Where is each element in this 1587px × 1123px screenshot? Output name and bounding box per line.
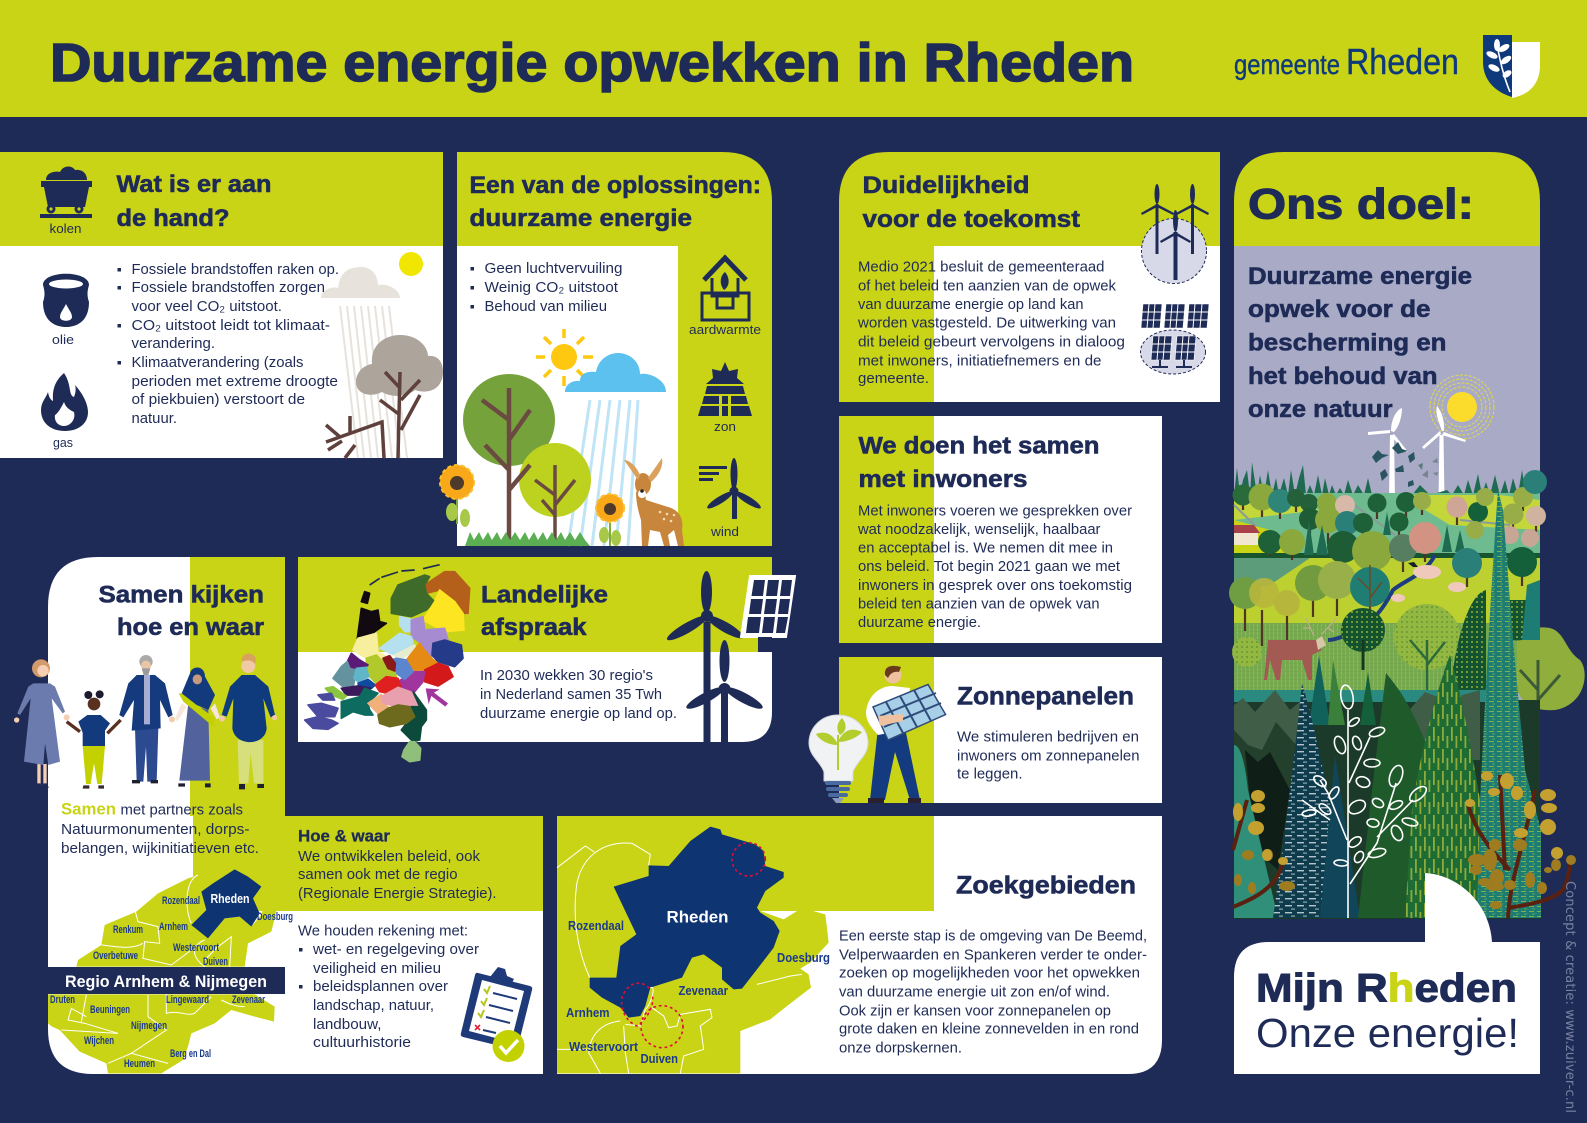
text: hoe en waar: beleidsplannen over	[313, 978, 448, 995]
map: Rheden search areas	[557, 816, 829, 1073]
text: hoe en waar: cultuurhistorie	[313, 1034, 411, 1051]
right crown tree	[1517, 627, 1585, 710]
body text	[857, 258, 1125, 387]
body text: We stimuleren bedrijven en	[957, 728, 1139, 746]
heading	[858, 432, 1100, 493]
icon: solar with sun	[698, 362, 752, 416]
map labels: Zevenaar	[678, 983, 728, 998]
heading: We doen het samen	[858, 432, 1100, 460]
bullet list: voor veel CO₂ uitstoot.	[132, 298, 282, 315]
body text: grote daken en kleine zonnevelden in en rond	[839, 1020, 1139, 1038]
label: aardwarmte: aardwarmte	[689, 322, 761, 337]
region labels: Arnhem	[159, 921, 188, 933]
label: zon: zon	[714, 419, 736, 434]
illustration: healthy nature	[440, 329, 684, 546]
body text	[957, 728, 1140, 782]
illustration: group of people holding hands	[14, 654, 277, 789]
bullet list: Weinig CO₂ uitstoot	[484, 279, 619, 296]
body text: Medio 2021 besluit de gemeenteraad	[858, 258, 1104, 276]
body text: duurzame energie op land op.	[480, 705, 677, 722]
panel: zonnepanelen	[809, 657, 1162, 803]
region labels: Wijchen	[84, 1035, 114, 1047]
heading: Wat is er aan	[116, 171, 272, 198]
arrow: pointing to Rheden region	[426, 688, 448, 707]
sheep	[1391, 562, 1466, 602]
heading: met inwoners	[858, 466, 1028, 493]
person: older man	[119, 655, 175, 783]
icon: wind turbine	[699, 458, 763, 519]
stream	[1328, 555, 1435, 640]
person: man in blue sweater	[219, 654, 277, 789]
text: hoe en waar: veiligheid en milieu	[313, 960, 441, 977]
body text: In 2030 wekken 30 regio's	[480, 667, 653, 684]
heading: Samen kijken	[98, 582, 264, 608]
heading: Duidelijkheid	[862, 172, 1030, 199]
body text: dit beleid gebeurt vervolgens in dialoog	[858, 334, 1125, 350]
text: hoe en waar: wet- en regelgeving over	[312, 941, 479, 958]
icon: solar panel	[741, 576, 795, 652]
body text	[839, 928, 1147, 1056]
dotted crowns	[1394, 604, 1460, 670]
wind turbines	[1368, 406, 1466, 501]
navy cone	[1273, 684, 1352, 918]
birds	[1372, 442, 1438, 487]
callout: mijn rheden onze energie: Onze energie!	[1256, 1010, 1519, 1056]
heading	[470, 172, 761, 232]
panel: een van de oplossingen	[440, 152, 772, 546]
text: hoe en waar: (Regionale Energie Strategie).	[298, 885, 496, 902]
region labels: Druten	[50, 994, 75, 1006]
label: wind: wind	[710, 524, 739, 539]
panel: zoekgebieden	[557, 816, 1162, 1074]
bullet list: natuur.	[132, 410, 177, 427]
heading	[481, 582, 608, 641]
body text: te leggen.	[957, 766, 1022, 782]
panel: wat is er aan de hand	[0, 152, 443, 458]
logo: gemeente Rheden: Rheden	[1346, 41, 1459, 82]
region labels: Lingewaard	[166, 994, 209, 1006]
text: samen met partners: Natuurmonumenten, dorps-	[61, 821, 249, 838]
body text: met inwoners, initiatiefnemers en de	[858, 352, 1102, 370]
panel: samen kijken hoe en waar / hoe en waar	[14, 557, 543, 1074]
heading: afspraak	[481, 614, 587, 641]
heading: voor de toekomst	[862, 206, 1080, 233]
striped cone	[1405, 655, 1490, 918]
treeline	[1234, 462, 1540, 495]
icon: gas flame	[41, 373, 88, 431]
body text: duurzame energie.	[858, 614, 981, 631]
body text: wat noodzakelijk, wenselijk, haalbaar	[857, 521, 1100, 538]
region title bar: Regio Arnhem & Nijmegen	[65, 972, 267, 991]
bullet list: perioden met extreme droogte	[132, 373, 338, 390]
body text: Met inwoners voeren we gesprekken over	[858, 502, 1132, 520]
bullet list: verandering.	[132, 335, 215, 352]
grey mountain right	[1405, 690, 1480, 760]
statement: bescherming en	[1248, 330, 1446, 356]
meadow back	[1234, 493, 1540, 555]
heading: de hand?	[116, 205, 230, 232]
conifers mid	[1309, 656, 1330, 725]
bullet list: Fossiele brandstoffen zorgen	[132, 279, 325, 296]
statement: opwek voor de	[1248, 296, 1430, 323]
text: samen met partners: belangen, wijkinitiatieven etc.	[61, 840, 259, 857]
bullet list: CO₂ uitstoot leidt tot klimaat-	[132, 317, 330, 334]
text: samen met partners	[61, 800, 259, 857]
heading: Zoekgebieden	[956, 872, 1136, 900]
region labels: Renkum	[113, 924, 143, 936]
header band	[0, 0, 1587, 117]
text: hoe en waar: samen ook met de regio	[298, 866, 458, 883]
logo: gemeente Rheden	[1234, 35, 1540, 98]
callout: mijn rheden onze energie	[1234, 873, 1540, 1074]
label: kolen: kolen	[50, 221, 82, 236]
text: hoe en waar: Hoe & waar	[298, 826, 390, 846]
bullet list: Behoud van milieu	[484, 298, 607, 315]
panel: duidelijkheid voor de toekomst	[839, 152, 1220, 402]
small trees	[1229, 470, 1547, 667]
icon: sunflower left	[440, 465, 474, 527]
body text: van duurzame energie uit zon en/of wind.	[839, 984, 1110, 1000]
map: 30 regions of the Netherlands	[305, 565, 470, 762]
heading	[862, 172, 1080, 233]
icon: clipboard with check	[461, 967, 532, 1062]
title: Duurzame energie opwekken in Rheden	[50, 33, 1134, 93]
body text: ons beleid. Tot begin 2021 gaan we met	[858, 558, 1121, 575]
region labels: Zevenaar	[232, 994, 265, 1006]
body text: en acceptabel is. We nemen dit mee in	[858, 540, 1113, 556]
region title bar	[48, 967, 285, 994]
heading: duurzame energie	[470, 205, 692, 232]
icon: turbines in circle	[1141, 184, 1209, 284]
dark green cone	[1358, 673, 1470, 918]
bullet list: Klimaatverandering (zoals	[132, 354, 304, 371]
text: hoe en waar: We ontwikkelen beleid, ook	[298, 848, 480, 865]
map labels: Arnhem	[566, 1005, 610, 1020]
panel: we doen het samen met inwoners	[839, 416, 1162, 643]
illustration: drought and storm	[321, 252, 443, 458]
map labels: Duiven	[640, 1051, 678, 1066]
region labels: Duiven	[203, 956, 228, 968]
callout: mijn rheden onze energie: Mijn R heden	[1256, 966, 1517, 1010]
map: regio arnhem en nijmegen	[48, 869, 278, 1073]
map labels: Rozendaal	[568, 918, 624, 933]
bullet list	[118, 261, 339, 427]
body text: Een eerste stap is de omgeving van De Beemd,	[839, 928, 1147, 944]
text: hoe en waar: landbouw,	[313, 1016, 382, 1033]
person: woman in dress	[14, 659, 70, 788]
teal tree	[1350, 567, 1390, 607]
text: hoe en waar: We houden rekening met:	[298, 922, 468, 940]
panel: ons doel	[1229, 152, 1585, 919]
illustration: landscape	[1229, 375, 1585, 919]
tall teal cone	[1477, 490, 1541, 918]
icon: sun	[1430, 375, 1494, 439]
icon: solar panels in circle	[1140, 304, 1209, 374]
region labels: Doesburg	[257, 911, 293, 923]
house	[1234, 525, 1260, 545]
person: woman with hijab	[175, 667, 220, 787]
heading: Een van de oplossingen:	[470, 172, 761, 199]
text: hoe en waar	[298, 826, 496, 1051]
map labels: Doesburg	[777, 950, 830, 965]
body text: Velperwaarden en Spankeren verder te onder-	[839, 946, 1147, 964]
region labels: Rheden	[210, 891, 250, 906]
body text: onze dorpskernen.	[839, 1040, 962, 1056]
heading: hoe en waar	[117, 614, 264, 641]
region labels: Overbetuwe	[93, 950, 138, 962]
heading: Zonnepanelen	[957, 682, 1134, 710]
icon: oil barrel	[43, 274, 89, 327]
text: samen met partners: Samen	[61, 800, 116, 818]
region labels: Beuningen	[90, 1004, 130, 1016]
illustration: person carrying solar panel	[866, 666, 946, 803]
lower forest base	[1234, 700, 1540, 919]
region labels: Rozendaal	[162, 895, 200, 907]
statement: het behoud van	[1248, 363, 1438, 390]
text: hoe en waar: landschap, natuur,	[313, 997, 434, 1014]
body text: beleid ten aanzien van de opwek van	[858, 596, 1100, 612]
map labels: Westervoort	[569, 1039, 639, 1054]
heading: Landelijke	[481, 582, 608, 608]
body text	[857, 502, 1132, 631]
icon: coal cart	[40, 166, 92, 218]
logo: gemeente Rheden: gemeente	[1234, 49, 1340, 80]
body text: inwoners in gesprek over ons toekomstig	[858, 577, 1132, 594]
heading: Ons doel:	[1248, 180, 1474, 228]
heading	[98, 582, 264, 641]
map labels: Rheden	[666, 908, 728, 926]
body text: worden vastgesteld. De uitwerking van	[857, 314, 1116, 332]
bullet list	[470, 260, 622, 315]
credit line: Concept & creatie: www.zuiver-c.nl	[1562, 881, 1577, 1113]
body text: Ook zijn er kansen voor zonnepanelen op	[839, 1002, 1111, 1020]
bullet list: Geen luchtvervuiling	[484, 260, 622, 277]
region labels: Berg en Dal	[170, 1048, 211, 1060]
body text: van duurzame energie op land kan	[858, 296, 1084, 313]
statement	[1248, 263, 1472, 423]
label: gas: gas	[53, 435, 73, 450]
bullet list: of piekbuien) verstoort de	[132, 391, 305, 408]
label: olie: olie	[52, 332, 74, 347]
body text: in Nederland samen 35 Twh	[480, 686, 662, 703]
region labels: Westervoort	[173, 942, 219, 954]
brown branches with gold leaves	[1233, 771, 1576, 918]
person: child	[67, 690, 121, 789]
icon: sunflower right	[596, 494, 624, 546]
body text: zoeken op mogelijkheden voor het opwekken	[839, 964, 1140, 982]
region labels: Heumen	[124, 1058, 155, 1070]
bullet list: Fossiele brandstoffen raken op.	[132, 261, 339, 278]
region labels: Nijmegen	[131, 1020, 167, 1032]
heading	[116, 171, 272, 232]
statement: onze natuur	[1248, 396, 1392, 423]
white plant	[1302, 684, 1429, 918]
body text: inwoners om zonnepanelen	[957, 748, 1140, 764]
icon: fawn	[624, 458, 684, 546]
panel: landelijke afspraak	[298, 557, 795, 762]
body text: of het beleid ten aanzien van de opwek	[858, 278, 1116, 294]
statement: Duurzame energie	[1248, 263, 1472, 290]
meadow front	[1234, 558, 1540, 628]
body text: gemeente.	[858, 370, 929, 387]
icon: light bulb with plant	[809, 715, 868, 803]
icon: wind turbines	[665, 571, 765, 742]
text: samen met partners: met partners zoals	[120, 802, 243, 818]
icon: geothermal house	[702, 258, 749, 320]
map labels	[566, 908, 830, 1066]
deer	[1264, 618, 1337, 680]
region labels	[50, 891, 293, 1070]
body text	[480, 667, 677, 722]
